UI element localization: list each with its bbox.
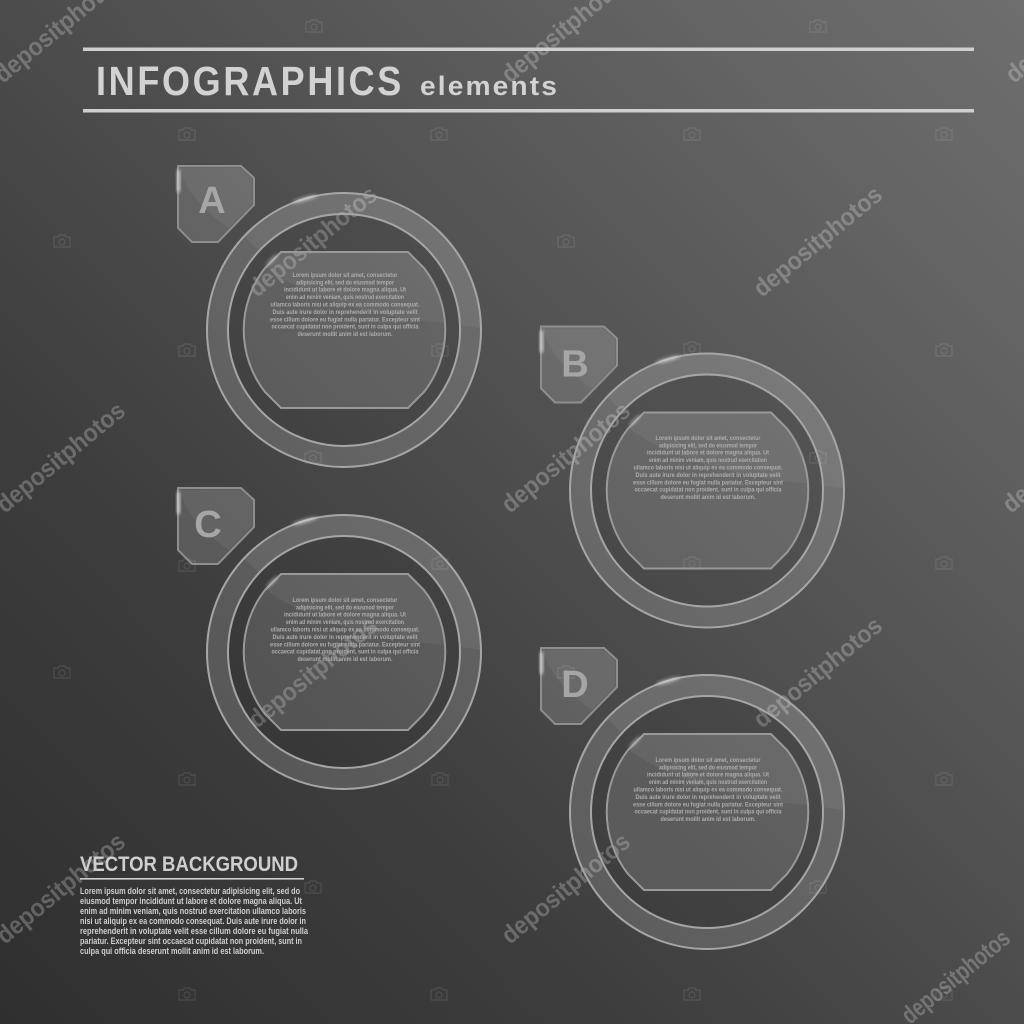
body paragraph: nisi ut aliquip ex ea commodo consequat. Duis aute irure dolor in xyxy=(80,916,306,926)
panel text B: Lorem ipsum dolor sit amet, consectetur xyxy=(656,436,761,442)
panel text A: deserunt mollit anim id est laborum. xyxy=(298,332,393,338)
panel text B: Duis aute irure dolor in reprehenderit in voluptate velit xyxy=(636,473,780,479)
badge C xyxy=(177,488,254,564)
panel text B: esse cillum dolore eu fugiat nulla pariatur. Excepteur sint xyxy=(633,480,783,486)
panel text A xyxy=(270,273,420,338)
panel text B: ullamco laboris nisi ut aliquip ex ea commodo consequat. xyxy=(634,466,783,472)
panel text C: esse cillum dolore eu fugiat nulla pariatur. Excepteur sint xyxy=(270,642,420,648)
panel text C: adipisicing elit, sed do eiusmod tempor xyxy=(296,605,395,611)
panel text C: incididunt ut labore et dolore magna aliqua. Ut xyxy=(284,613,406,619)
ring B xyxy=(570,353,844,628)
panel text B: occaecat cupidatat non proident, sunt in culpa qui officia xyxy=(634,488,782,494)
heading: VECTOR BACKGROUND xyxy=(80,853,298,876)
badge B: B xyxy=(561,344,589,386)
ring A xyxy=(207,193,481,467)
panel text B xyxy=(633,436,783,501)
panel text A: Lorem ipsum dolor sit amet, consectetur xyxy=(292,273,398,279)
panel text A: enim ad minim veniam, quis nostrud exercitation xyxy=(286,295,404,301)
panel text A: ullamco laboris nisi ut aliquip ex ea commodo consequat. xyxy=(270,302,420,308)
title: INFOGRAPHICS: INFOGRAPHICS xyxy=(96,58,404,104)
watermarks: depositphotos xyxy=(748,181,888,303)
watermarks: depositphotos xyxy=(748,612,888,734)
panel text A: esse cillum dolore eu fugiat nulla pariatur. Excepteur sint xyxy=(270,317,420,323)
ring D xyxy=(570,675,844,949)
panel text C: Duis aute irure dolor in reprehenderit in voluptate velit xyxy=(272,635,418,641)
subtitle: elements: elements xyxy=(420,71,559,101)
panel text C: occaecat cupidatat non proident, sunt in culpa qui officia xyxy=(272,650,419,656)
badge D: D xyxy=(561,664,589,706)
title block xyxy=(83,48,974,112)
body paragraph: reprehenderit in voluptate velit esse cillum dolore eu fugiat nulla xyxy=(80,926,309,936)
panel text D: enim ad minim veniam, quis nostrud exercitation xyxy=(649,780,767,786)
panel text B: enim ad minim veniam, quis nostrud exercitation xyxy=(649,458,767,464)
panel text A: Duis aute irure dolor in reprehenderit in voluptate velit xyxy=(272,310,418,316)
panel text D: Duis aute irure dolor in reprehenderit in voluptate velit xyxy=(636,795,780,801)
panel text D: incididunt ut labore et dolore magna aliqua. Ut xyxy=(647,773,769,779)
panel text A: occaecat cupidatat non proident, sunt in culpa qui officia xyxy=(272,325,419,331)
body paragraph: enim ad minim veniam, quis nostrud exercitation ullamco laboris xyxy=(80,906,306,916)
body paragraph xyxy=(80,886,309,956)
badge A xyxy=(177,166,254,242)
panel text D: deserunt mollit anim id est laborum. xyxy=(660,817,756,823)
badge D xyxy=(540,648,617,724)
ring C xyxy=(207,515,481,789)
panel text D: esse cillum dolore eu fugiat nulla pariatur. Excepteur sint xyxy=(633,802,783,808)
panel text C xyxy=(270,598,420,663)
panel text B: adipisicing elit, sed do eiusmod tempor xyxy=(659,443,758,449)
panel text D xyxy=(633,758,783,823)
badge C: C xyxy=(194,504,222,546)
watermarks: depositphotos xyxy=(496,828,636,950)
vector background text block xyxy=(80,853,309,956)
glass panel A xyxy=(244,252,445,408)
badge B xyxy=(540,326,617,402)
watermarks: depositphotos xyxy=(243,612,383,734)
watermarks: depositphotos xyxy=(243,181,383,303)
panel C xyxy=(177,488,481,789)
panel text C: enim ad minim veniam, quis nostrud exercitation xyxy=(286,620,404,626)
panel text D: Lorem ipsum dolor sit amet, consectetur xyxy=(656,758,761,764)
badge A: A xyxy=(198,180,226,222)
panel text B: deserunt mollit anim id est laborum. xyxy=(660,495,756,501)
panel text A: incididunt ut labore et dolore magna aliqua. Ut xyxy=(284,288,406,294)
panel text A: adipisicing elit, sed do eiusmod tempor xyxy=(296,280,395,286)
panel A xyxy=(177,166,481,467)
panel text C: deserunt mollit anim id est laborum. xyxy=(298,657,393,663)
panel text C: Lorem ipsum dolor sit amet, consectetur xyxy=(292,598,398,604)
body paragraph: Lorem ipsum dolor sit amet, consectetur adipisicing elit, sed do xyxy=(80,886,300,896)
panel text D: occaecat cupidatat non proident, sunt in culpa qui officia xyxy=(634,810,782,816)
panel D xyxy=(540,648,844,949)
glass panel B xyxy=(607,412,808,568)
watermarks: depositphotos xyxy=(496,397,636,519)
body paragraph: eiusmod tempor incididunt ut labore et dolore magna aliqua. Ut xyxy=(80,896,302,906)
panel B xyxy=(540,326,844,628)
body paragraph: pariatur. Excepteur sint occaecat cupidatat non proident, sunt in xyxy=(80,936,302,946)
body paragraph: culpa qui officia deserunt mollit anim id est laborum. xyxy=(80,946,264,956)
panel text C: ullamco laboris nisi ut aliquip ex ea commodo consequat. xyxy=(270,628,420,634)
panel text D: ullamco laboris nisi ut aliquip ex ea commodo consequat. xyxy=(634,788,783,794)
glass panel D xyxy=(607,734,808,890)
panel text B: incididunt ut labore et dolore magna aliqua. Ut xyxy=(647,451,769,457)
glass panel C xyxy=(244,574,445,730)
panel text D: adipisicing elit, sed do eiusmod tempor xyxy=(659,765,758,771)
